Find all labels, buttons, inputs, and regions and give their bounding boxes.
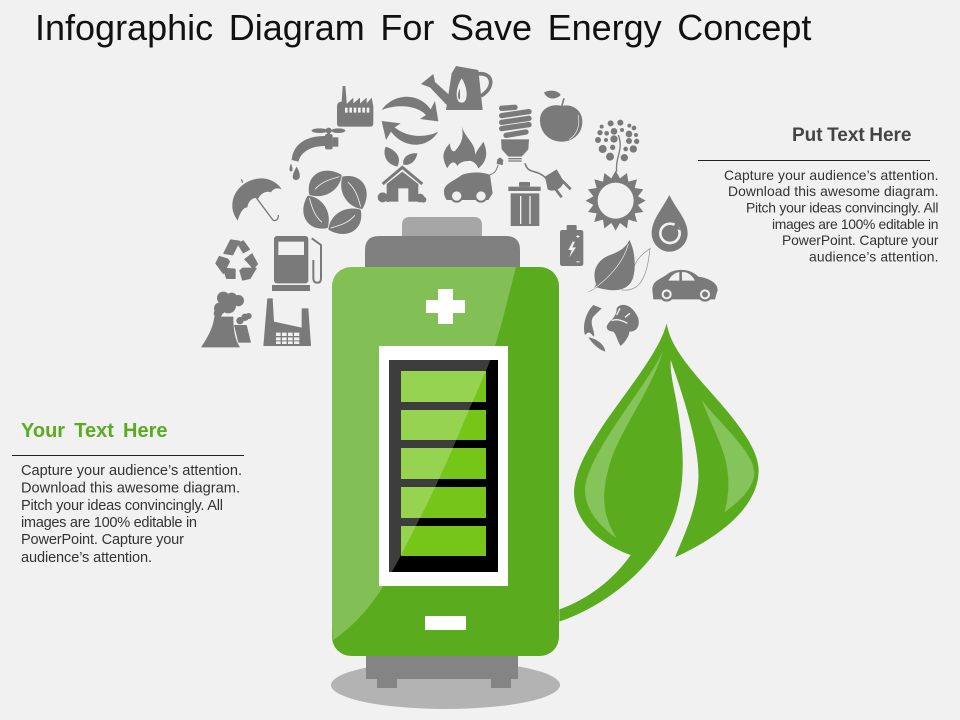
battery body: [332, 267, 559, 656]
icon: eco house: [378, 147, 426, 203]
icon: factory: [263, 298, 311, 346]
icon: small factory: [337, 86, 373, 127]
icon: car: [652, 270, 718, 302]
icons: left half of arc: [201, 86, 438, 347]
icon: battery: [560, 225, 583, 266]
charge bars: [401, 371, 486, 556]
right body text: [724, 167, 939, 264]
icon: energy saving bulb: [501, 107, 529, 162]
left body text: Pitch your ideas convincingly. All: [21, 498, 223, 514]
right body text: Capture your audience’s attention.: [724, 167, 938, 183]
icon: apple: [540, 91, 582, 142]
left heading: Your Text Here: [21, 420, 168, 442]
icons: right half of arc: [421, 66, 718, 352]
icon: globe: [584, 305, 639, 352]
minus sign: [425, 616, 466, 630]
icon: electric car: [444, 157, 503, 203]
battery base feet: [366, 650, 518, 688]
battery: [331, 217, 560, 709]
icon: power plug: [525, 163, 571, 197]
left body text: PowerPoint. Capture your: [21, 532, 184, 548]
leaf with stem: [559, 323, 759, 622]
icon: circular arrows: [382, 97, 438, 145]
panel: left text block: [12, 420, 244, 566]
icon: kettle: [421, 66, 491, 110]
icon: water tap: [289, 128, 345, 180]
glass reflection: [332, 267, 516, 640]
icon: four leaves circle: [303, 171, 367, 234]
right body text: Pitch your ideas convincingly. All: [746, 200, 938, 216]
icon: dotted tree: [595, 120, 639, 172]
icon: trash can: [508, 182, 541, 226]
icon: fuel pump: [272, 236, 321, 291]
icon: umbrella: [232, 178, 282, 221]
panel: right text block: [698, 125, 939, 264]
display frame: [379, 346, 508, 586]
right body text: audience’s attention.: [809, 248, 938, 264]
title: Infographic Diagram For Save Energy Concept: [35, 7, 811, 48]
icon: recycle symbol: [216, 240, 257, 280]
right heading: Put Text Here: [792, 125, 911, 146]
icon: leaf: [587, 240, 650, 292]
icon: sun: [586, 171, 646, 231]
left body text: audience’s attention.: [21, 550, 152, 566]
icon: water drop: [652, 195, 688, 252]
left body text: images are 100% editable in: [21, 515, 197, 531]
left body text: Capture your audience’s attention.: [21, 463, 242, 479]
left body text: [21, 463, 242, 566]
battery shoulder: [365, 236, 520, 270]
right body text: Download this awesome diagram.: [728, 183, 938, 199]
icon: flame: [443, 127, 486, 168]
battery shadow: [331, 661, 560, 709]
right body text: PowerPoint. Capture your: [782, 232, 939, 248]
icon: cooling towers: [201, 292, 252, 347]
right body text: images are 100% editable in: [772, 216, 938, 232]
plus sign: [426, 289, 465, 324]
left body text: Download this awesome diagram.: [21, 480, 240, 496]
display screen: [389, 360, 498, 572]
battery top cap: [402, 217, 482, 240]
